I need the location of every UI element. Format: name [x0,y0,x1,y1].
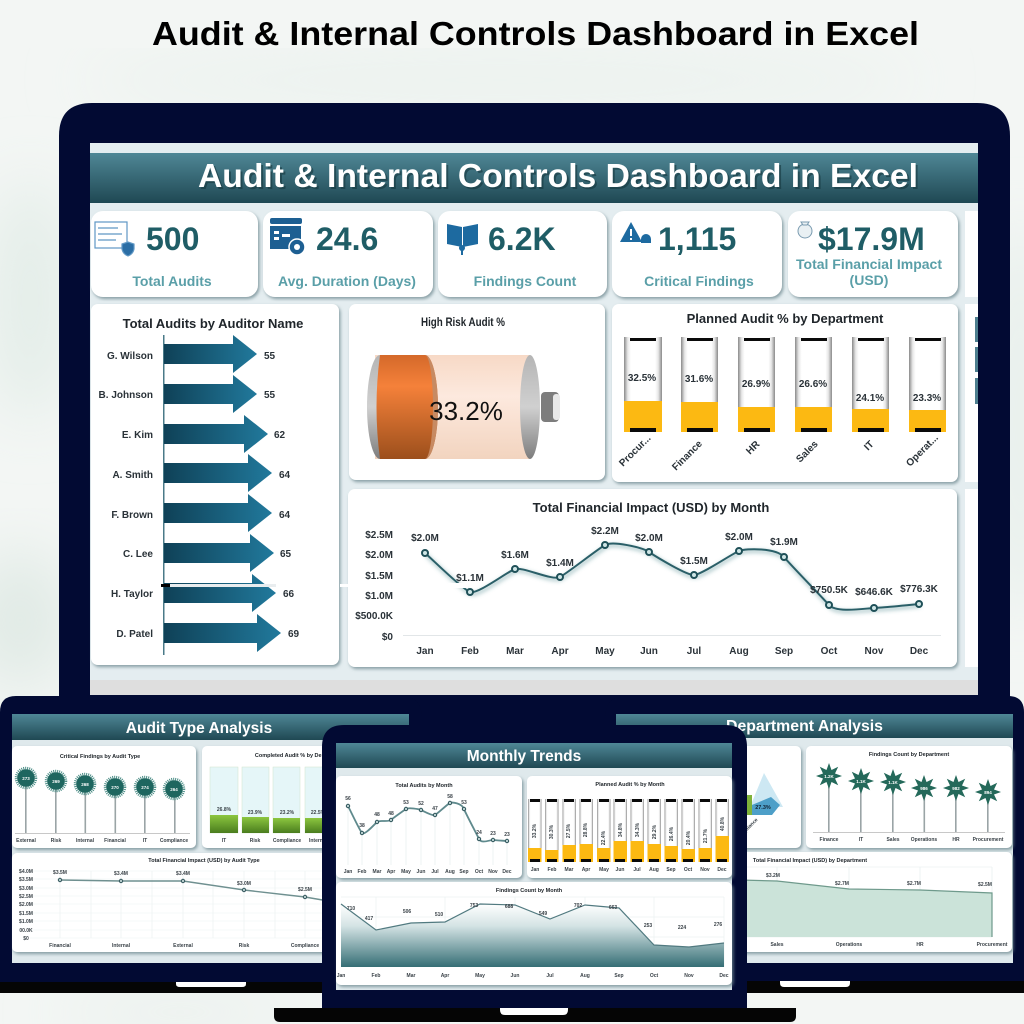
panel: findings count by department: 1.1K [888,780,898,785]
panel: total audits by month: 56 [345,796,351,802]
month labels: Nov [865,646,884,657]
right edge partial panels [965,304,978,667]
panel: financial impact by audit type: Financial [49,943,71,949]
partial next card [965,211,978,297]
pyramid: 27.3% [755,805,771,811]
panel: total audits by month: Total Audits by Month [395,783,453,789]
header: Monthly Trends [467,748,581,765]
panel: financial impact by department: $3.2M [766,873,780,879]
month labels: Oct [821,646,838,657]
panel: findings count by month: Findings Count by Month [496,888,563,894]
data labels: $646.6K [855,587,894,598]
y axis labels: $2.0M [365,550,393,561]
KPI: total audits [91,211,258,297]
panel: findings count by department: IT [859,837,863,843]
icon: open book [447,224,478,255]
panel: completed audit percent: Completed Audit % by Department [255,753,345,759]
auditor names: F. Brown [111,510,153,521]
auditor names: A. Smith [112,470,153,481]
battery gauge: 33.2% [429,396,503,426]
KPI: total audits: Total Audits [132,273,212,289]
panel: findings count by department: 894 [984,790,992,795]
arrow bars [164,335,281,652]
panel: total audits by month: 23 [504,832,510,838]
panel: planned audit percent by month: Planned Audit % by Month [595,782,665,788]
panel: planned audit percent by department [612,304,958,482]
panel: financial impact by audit type: $3.4M [176,871,190,877]
KPI: total financial impact: $17.9M [818,221,925,257]
panel: financial impact by audit type: $1.5M [19,911,33,917]
panel: planned audit percent by month: Jun [616,867,624,873]
left laptop: audit type analysis [0,696,422,993]
panel: financial impact by department: Total Financial Impact (USD) by Department [753,858,867,864]
panel: completed by department: Compliance [735,817,760,841]
panel: findings count by month: Feb [372,973,380,979]
panel: findings count by department: HR [952,837,960,843]
KPI: critical findings: 1,115 [658,221,736,257]
panel: findings count by month: Jul [546,973,554,979]
panel: total audits by month: 48 [374,812,380,818]
month labels: Sep [775,646,793,657]
panel: findings count by month: 688 [505,904,513,910]
auditor names [99,351,153,640]
panel: financial impact by audit type: Total Financial Impact (USD) by Audit Type [148,858,260,864]
tube labels: Sales [794,439,821,465]
panel: findings count by month: Jan [337,973,345,979]
tube percentages [628,373,941,404]
icon: calendar clock [270,218,305,255]
panel: completed audit percent [202,746,409,848]
panel: findings count by month: 510 [435,912,443,918]
y axis labels [355,530,394,643]
tube labels: HR [744,439,763,457]
panel: financial impact by department: $2.7M [835,881,849,887]
right laptop: department analysis [605,696,1024,993]
panel: findings count by month: 276 [714,922,722,928]
panel: planned audit percent by month: Jan [531,867,539,873]
panel: completed audit percent: 26.8% [217,807,232,813]
dashboard header: Audit & Internal Controls Dashboard in Excel [200,159,920,196]
month labels: May [595,646,615,657]
panel: total audits by month: Nov [488,869,498,875]
panel: financial impact by audit type: $1.0M [19,919,33,925]
panel: total audits by month: Jul [431,869,439,875]
tube percentages: 31.6% [685,374,713,385]
panel: planned audit percent by month: Dec [717,867,727,873]
arrow values [264,351,300,640]
panel: findings count by month: 417 [365,916,373,922]
panel: critical findings by audit type: Internal [76,838,95,844]
panel: findings count by month: Sep [614,973,624,979]
panel: findings count by month: Apr [441,973,449,979]
panel: financial impact by audit type: Risk [239,943,249,949]
panel: findings count by month: 224 [678,925,686,931]
panel: planned audit percent by month: 29.2% [652,824,658,839]
panel: total audits by month: 47 [432,806,438,812]
panel: completed audit percent: Internal [309,838,328,844]
panel: total audits by month: Mar [373,869,381,875]
KPI: average duration: Avg. Duration (Days) [278,273,416,289]
panel: findings count by month: Oct [650,973,658,979]
panel: financial impact by audit type: External [173,943,193,949]
month labels: Aug [729,646,749,657]
pyramid [745,773,783,815]
panel: financial impact by audit type: $3.5M [19,877,33,883]
panel: planned audit percent by month: Nov [700,867,710,873]
data labels: $2.2M [591,526,619,537]
tube labels: IT [862,439,876,453]
arrow values: 55 [264,390,276,401]
panel: financial impact by department: $2.7M [907,881,921,887]
panel: planned audit percent by month: Apr [582,867,590,873]
panel: critical findings by audit type: IT [143,838,147,844]
data labels: $2.0M [725,532,753,543]
panel: completed audit percent: IT [222,838,226,844]
data labels: $2.0M [411,533,439,544]
panel: total audits by month: 23 [490,831,496,837]
panel: findings count by department: Finance [820,837,839,843]
data labels: $750.5K [810,585,849,596]
panel: findings count by month: Dec [719,973,729,979]
line chart [425,544,919,610]
panel: completed audit percent: Risk [250,838,260,844]
panel: total financial impact by month: Total Financial Impact (USD) by Month [533,500,769,515]
data labels: $1.5M [680,556,708,567]
month labels [416,646,929,657]
y axis labels: $1.0M [365,591,393,602]
panel: critical findings by audit type: Risk [51,838,61,844]
panel: total audits by month: 52 [418,801,424,807]
panel: planned audit percent by month: 22.4% [601,830,607,845]
month labels: Apr [551,646,569,657]
panel: planned audit percent by month: Oct [684,867,692,873]
panel: planned audit percent by month: 21.7% [703,828,709,843]
panel: total audits by auditor name [91,304,339,665]
arrow values: 62 [274,430,286,441]
month labels: Dec [910,646,929,657]
panel: findings count by department: Operations [911,837,937,843]
panel: planned audit percent by month: 34.3% [635,822,641,837]
panel: critical findings by audit type: Critical Findings by Audit Type [60,754,140,760]
KPI: findings count [438,211,607,297]
data labels: $2.0M [635,533,663,544]
amber levels [624,401,946,432]
KPI: total financial impact: Total Financial Impact [796,256,942,272]
panel: findings count by department: 982 [952,786,960,791]
tube labels: Operat... [904,433,941,469]
panel: critical findings by audit type: 270 [111,785,119,790]
panel: findings count by month: 702 [574,903,582,909]
auditor names: B. Johnson [99,390,153,401]
panel: financial impact by audit type: $3.5M [53,870,67,876]
panel: planned audit percent by month: 28.8% [583,822,589,837]
arrow values: 64 [279,510,291,521]
KPI: total audits: 500 [146,221,199,257]
KPI: average duration: 24.6 [316,221,378,257]
panel: findings count by month: Aug [580,973,590,979]
panel: planned audit percent by month: 33.2% [532,823,538,838]
panel: findings count by month: May [475,973,485,979]
auditor names: E. Kim [122,430,153,441]
header [616,714,1013,738]
month labels: Jun [640,646,658,657]
auditor names: H. Taylor [111,589,153,600]
panel: planned audit percent by month: 30.3% [549,824,555,839]
data labels: $1.1M [456,573,484,584]
panel: findings count by month: Jun [511,973,519,979]
icon: money bag [798,222,812,238]
panel: critical findings by audit type: External [16,838,36,844]
laptop frame [59,103,1010,975]
panel: critical findings by audit type: Compliance [160,838,188,844]
panel: total audits by month: 53 [461,800,467,806]
panel: total audits by month: Jan [344,869,352,875]
panel: financial impact by audit type: $3.4M [114,871,128,877]
KPI: findings count: Findings Count [474,273,577,289]
panel: total audits by month: Oct [475,869,483,875]
panel: total audits by month: 38 [359,823,365,829]
panel: completed by department [616,746,801,848]
panel: financial impact by department [616,852,1012,952]
panel: findings count by month: 253 [644,923,652,929]
panel: findings count by month: 753 [470,903,478,909]
panel: total audits by month: Aug [445,869,455,875]
KPI: total financial impact [788,211,958,297]
panel: total audits by month: Dec [502,869,512,875]
gauge tubes [624,337,946,432]
panel: critical findings by audit type: Financial [104,838,126,844]
center laptop: monthly trends [274,725,796,1022]
panel: total audits by month: Feb [358,869,366,875]
data labels: $1.6M [501,550,529,561]
panel: findings count by month: Nov [684,973,694,979]
line markers [422,542,922,611]
panel: findings count by department [806,746,1012,848]
panel: findings count by month: 663 [609,905,617,911]
panel: high risk audit gauge [349,304,605,480]
panel: planned audit percent by department: Planned Audit % by Department [687,311,884,326]
panel: financial impact by audit type: 00.0K [19,928,33,934]
panel: total audits by month: Apr [387,869,395,875]
panel: financial impact by audit type: Internal [112,943,131,949]
tube labels: Procur... [617,433,654,469]
panel: findings count by department: Procurement [973,837,1004,843]
icon: audit checklist [95,222,134,256]
panel: critical findings by audit type [12,746,196,848]
arrow values: 69 [288,629,300,640]
panel: financial impact by department: $2.5M [978,882,992,888]
tube percentages: 26.6% [799,379,827,390]
panel: financial impact by audit type: $4.0M [19,869,33,875]
panel: total audits by month: 24 [476,830,482,836]
battery gauge [367,355,560,459]
arrow values: 65 [280,549,292,560]
month labels: Feb [461,646,479,657]
tube percentages: 23.3% [913,393,941,404]
panel: financial impact by department: Operations [836,942,862,948]
arrow values: 55 [264,351,276,362]
panel: total audits by month: 58 [447,794,453,800]
auditor names: G. Wilson [107,351,153,362]
panel: planned audit percent by month: Feb [548,867,556,873]
icon: warning alarm [620,222,651,243]
screen [90,143,978,695]
tube percentages: 26.9% [742,379,770,390]
panel: financial impact by department: HR [916,942,924,948]
panel: financial impact by audit type: $2.5M [298,887,312,893]
panel: planned audit percent by month: May [599,867,609,873]
KPI: findings count: 6.2K [488,221,556,257]
panel: critical findings by audit type: 273 [22,776,30,781]
KPI: critical findings [612,211,782,297]
KPI: total financial impact: (USD) [850,272,888,288]
header [336,743,732,768]
auditor names: C. Lee [123,549,153,560]
panel: financial impact by department: Sales [770,942,784,948]
auditor names: D. Patel [116,629,153,640]
panel: findings count by month: Mar [407,973,415,979]
panel: critical findings by audit type: 269 [52,779,60,784]
data labels [411,526,939,598]
panel: planned audit percent by month: Sep [666,867,676,873]
panel: financial impact by audit type: $2.5M [19,894,33,900]
panel: critical findings by audit type: 274 [141,785,149,790]
panel: total audits by month: 48 [388,811,394,817]
header: Department Analysis [726,718,883,735]
y axis labels: $2.5M [365,530,393,541]
page title: Audit & Internal Controls Dashboard in Excel [152,15,919,52]
header: Audit Type Analysis [126,720,272,737]
panel: financial impact by department: Procurement [977,942,1008,948]
tube labels [617,433,941,473]
panel: planned audit percent by month: Mar [565,867,573,873]
month labels: Jul [687,646,701,657]
panel: completed audit percent: 23.9% [248,810,263,816]
panel: findings count by month: 710 [347,906,355,912]
panel: critical findings by audit type: 268 [81,782,89,787]
panel: findings count by department: Findings Count by Department [869,752,949,758]
panel: planned audit percent by month: 20.4% [686,830,692,845]
panel: planned audit percent by month [527,776,732,878]
data labels: $776.3K [900,584,939,595]
panel: critical findings by audit type: 264 [170,787,178,792]
panel: findings count by department: Sales [886,837,900,843]
panel: findings count by department: 1.1K [856,779,866,784]
panel: findings count by department: 1.2K [824,774,834,779]
panel: total audits by month [336,776,522,878]
panel: findings count by department: 986 [920,786,928,791]
dashboard header [90,153,978,203]
panel: completed audit percent: Compliance [273,838,301,844]
panel: total audits by month: May [401,869,411,875]
panel: total audits by month: 53 [403,800,409,806]
panel: findings count by month: 506 [403,909,411,915]
tube percentages: 24.1% [856,393,884,404]
panel: planned audit percent by month: Jul [633,867,641,873]
panel: financial impact by audit type: $3.0M [237,881,251,887]
panel: findings count by month: 549 [539,911,547,917]
y axis labels: $0 [382,632,393,643]
panel: financial impact by audit type: $2.0M [19,902,33,908]
panel: planned audit percent by month: 34.8% [618,822,624,837]
panel: financial impact by audit type: $0 [23,936,29,942]
panel: completed audit percent: 23.2% [280,810,295,816]
data labels: $1.9M [770,537,798,548]
y axis labels: $500.0K [355,611,394,622]
panel: completed audit percent: 22.5% [311,810,326,816]
month labels: Jan [416,646,434,657]
KPI: average duration [263,211,433,297]
month labels: Mar [506,646,524,657]
y axis labels: $1.5M [365,571,393,582]
panel: total audits by auditor name: Total Audits by Auditor Name [123,316,303,331]
panel: financial impact by audit type: Compliance [291,943,319,949]
tube labels: Finance [670,438,705,473]
tube caps [630,338,941,432]
main laptop [59,103,1010,975]
data labels: $1.4M [546,558,574,569]
panel: planned audit percent by month: Aug [649,867,659,873]
arrow values: 64 [279,470,291,481]
panel: high risk audit gauge: High Risk Audit % [421,315,505,329]
panel: financial impact by audit type: $3.0M [19,886,33,892]
panel: planned audit percent by month: 26.4% [669,826,675,841]
panel: financial impact by audit type [12,853,409,952]
dashboard header: Audit & Internal Controls Dashboard in Excel [198,157,918,194]
panel: planned audit percent by month: 27.5% [566,823,572,838]
tube percentages: 32.5% [628,373,656,384]
KPI: critical findings: Critical Findings [644,273,754,289]
panel: total financial impact by month [348,489,957,667]
arrow values: 66 [283,589,295,600]
panel: total audits by month: Jun [417,869,425,875]
panel: planned audit percent by month: 40.8% [720,816,726,831]
panel: total audits by month: Sep [459,869,469,875]
header [12,714,409,740]
panel: findings count by month [336,882,732,985]
